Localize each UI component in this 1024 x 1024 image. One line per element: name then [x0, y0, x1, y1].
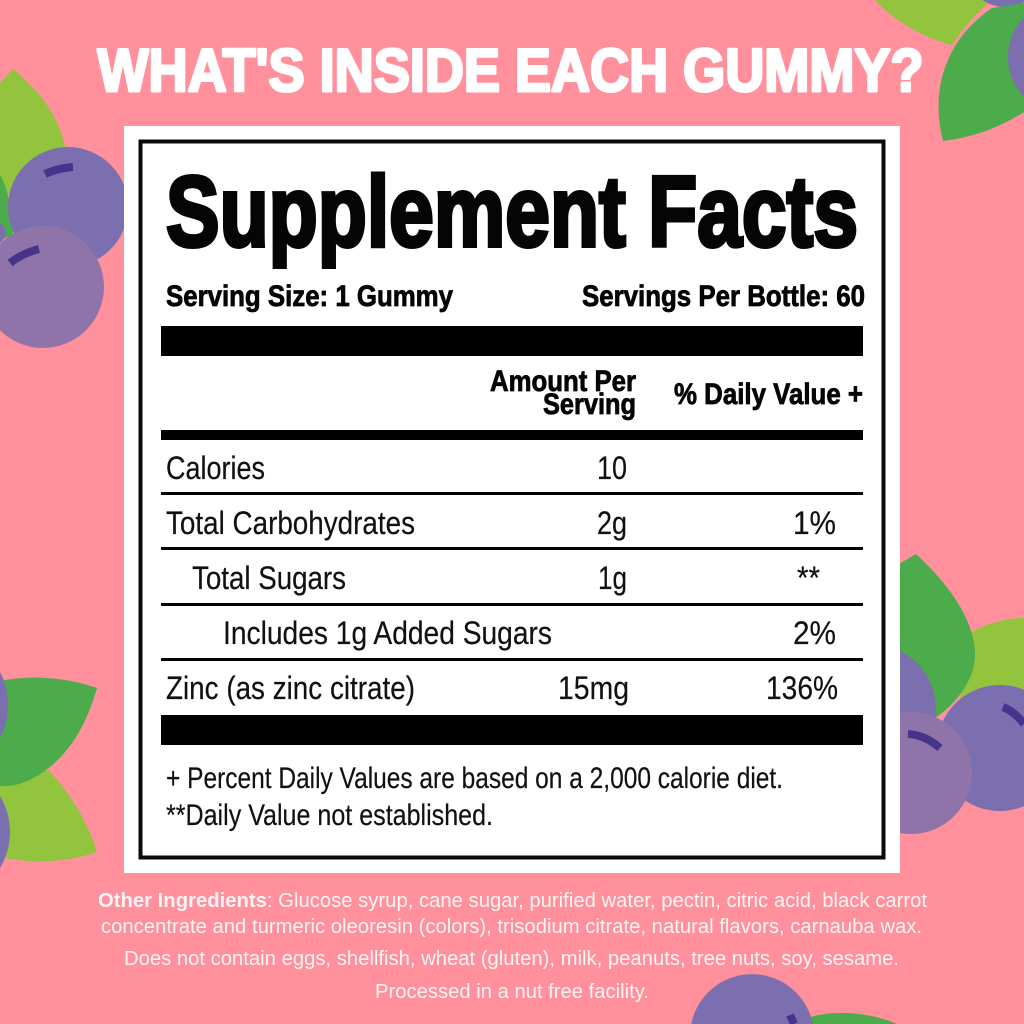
row: zinc: Zinc (as zinc citrate) — [166, 670, 415, 706]
row: zinc — [166, 670, 838, 706]
column header: amount per serving: Serving — [543, 388, 636, 421]
top black bar — [161, 326, 863, 356]
decoration: bottom-left berries and leaves — [0, 672, 97, 868]
row: calories — [166, 450, 627, 486]
other ingredients and allergen text — [98, 890, 927, 1003]
other ingredients and allergen text: Other Ingredients: Glucose syrup, cane sugar, purified water, pectin, citric acid, black carrot — [98, 890, 927, 912]
row: total carbohydrates: 2g — [597, 505, 627, 541]
decoration: top-left berries and leaves — [0, 69, 128, 348]
row: added sugars: 2% — [793, 615, 836, 651]
servings per bottle: Servings Per Bottle: 60 — [582, 280, 865, 313]
other ingredients and allergen text: concentrate and turmeric oleoresin (colors), trisodium citrate, natural flavors, carnauba wax. — [101, 916, 922, 938]
serving size: Serving Size: 1 Gummy — [166, 280, 453, 313]
column header: amount per serving: Amount Per — [490, 365, 636, 398]
row: zinc: 15mg — [558, 670, 629, 706]
row: added sugars — [223, 615, 836, 651]
column header: daily value: % Daily Value + — [674, 378, 863, 411]
footnotes — [166, 762, 783, 832]
panel: supplement facts label — [124, 126, 900, 873]
row: total carbohydrates — [166, 505, 836, 541]
row: calories: Calories — [166, 450, 265, 486]
other ingredients and allergen text: Does not contain eggs, shellfish, wheat (gluten), milk, peanuts, tree nuts, soy, sesame. — [124, 948, 899, 970]
row: total sugars: ** — [797, 560, 820, 596]
header rule — [161, 430, 863, 440]
row: calories: 10 — [597, 450, 627, 486]
row: total sugars: 1g — [598, 560, 627, 596]
decoration: top-right berries and leaves — [875, 0, 1024, 141]
row: total sugars — [192, 560, 820, 596]
footnotes: + Percent Daily Values are based on a 2,000 calorie diet. — [166, 762, 783, 795]
row: zinc: 136% — [766, 670, 838, 706]
row: total carbohydrates: Total Carbohydrates — [166, 505, 415, 541]
bottom black bar — [161, 715, 863, 745]
row: total sugars: Total Sugars — [192, 560, 346, 596]
title: WHAT'S INSIDE EACH GUMMY? — [98, 37, 924, 104]
row: added sugars: Includes 1g Added Sugars — [223, 615, 552, 651]
other ingredients and allergen text: Processed in a nut free facility. — [375, 981, 649, 1003]
column header: amount per serving — [490, 365, 636, 421]
heading: supplement facts: Supplement Facts — [166, 156, 858, 268]
footnotes: **Daily Value not established. — [166, 799, 493, 832]
row: total carbohydrates: 1% — [793, 505, 836, 541]
decoration: bottom berry and leaf — [691, 974, 897, 1024]
decoration: right berries and leaves — [806, 554, 1024, 834]
